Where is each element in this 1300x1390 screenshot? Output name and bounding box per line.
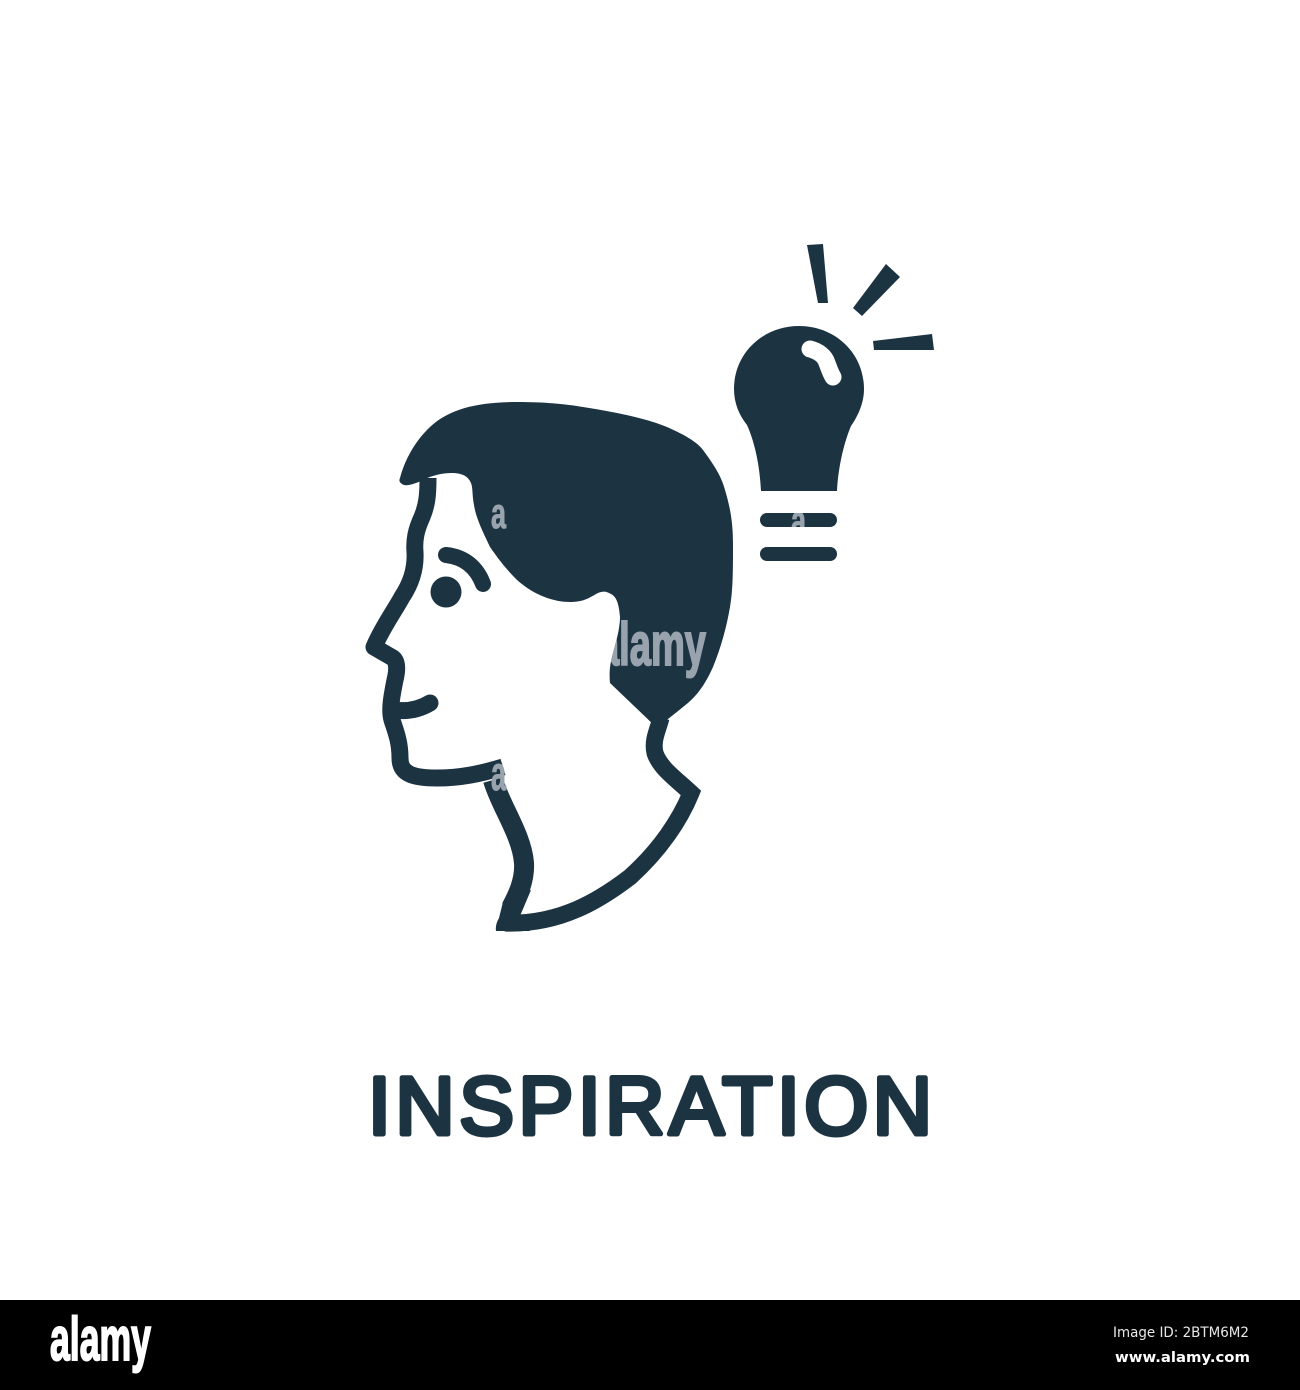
watermark fragments: alamy	[598, 611, 706, 678]
neck outline	[493, 780, 524, 908]
footer logo: alamy	[50, 1305, 151, 1373]
hair	[399, 402, 733, 728]
eye	[430, 576, 462, 608]
image id: Image ID: 2BTM6M2	[1113, 1325, 1249, 1341]
face profile outline	[374, 478, 503, 778]
light ray right	[873, 334, 934, 350]
mouth	[394, 703, 430, 711]
title: INSPIRATION	[368, 1061, 932, 1152]
watermark fragments	[491, 490, 807, 801]
bulb glass	[734, 326, 864, 491]
icon: light bulb	[734, 244, 934, 561]
watermark fragments: a	[491, 748, 506, 801]
watermark fragments: a	[491, 490, 507, 538]
website: www.alamy.com	[1115, 1350, 1250, 1366]
light ray middle	[853, 264, 900, 316]
bulb highlight	[810, 349, 833, 377]
eyebrow	[446, 555, 483, 584]
footer bar	[0, 1300, 1300, 1390]
bulb base bottom bar	[760, 547, 837, 561]
neck tip	[496, 890, 531, 931]
light ray left	[807, 244, 828, 303]
icon: head in profile	[374, 402, 733, 931]
shoulder outline	[505, 718, 691, 923]
bulb base top bar	[760, 513, 837, 527]
watermark fragments: a	[791, 497, 807, 545]
